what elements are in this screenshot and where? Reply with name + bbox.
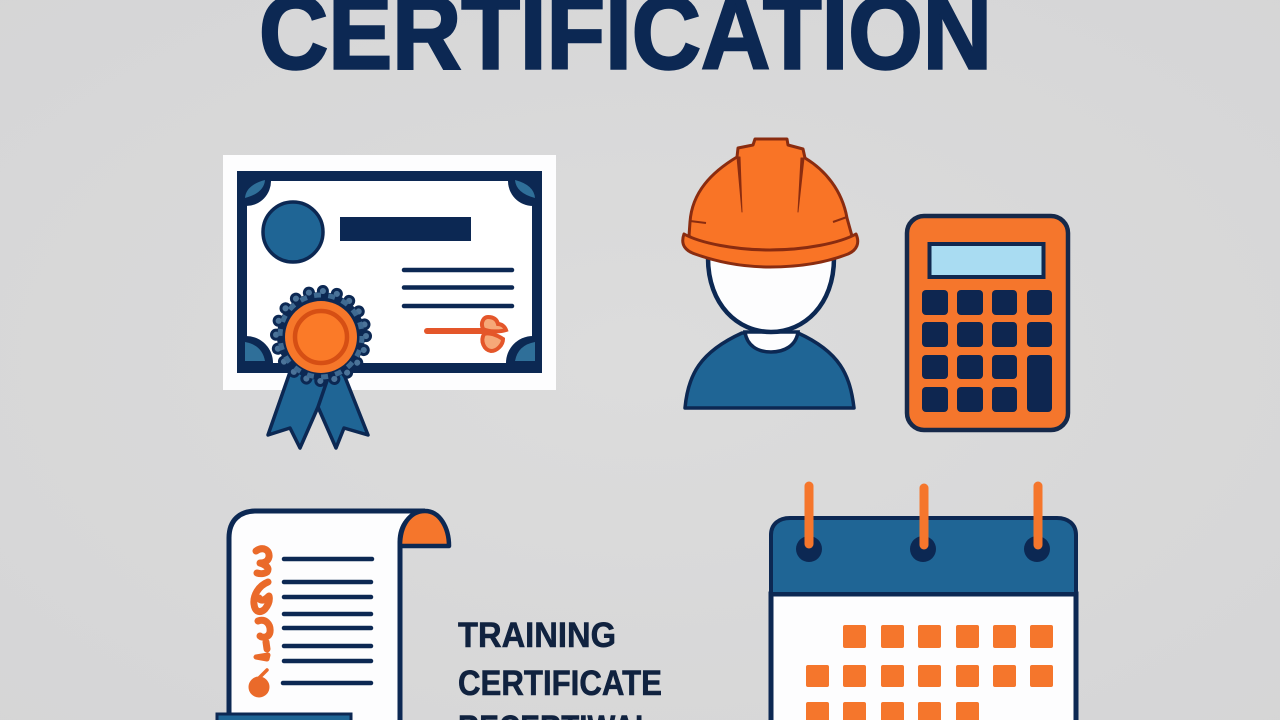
calculator keys xyxy=(922,290,1052,412)
binding rings xyxy=(809,486,1038,545)
text block: training certificate: CERTIFICATE xyxy=(458,664,662,703)
calendar header xyxy=(771,518,1076,594)
icon: calendar xyxy=(771,486,1076,720)
text block: training certificate: TRAINING xyxy=(458,616,616,655)
calculator body xyxy=(907,216,1068,430)
certificate paper xyxy=(223,155,556,390)
text block: training certificate xyxy=(458,616,662,720)
binding holes xyxy=(796,536,1050,562)
signature xyxy=(427,317,506,351)
scroll base xyxy=(217,714,351,720)
frame corner ornaments xyxy=(245,180,535,364)
emblem circle xyxy=(263,202,323,262)
icon: calculator xyxy=(907,216,1068,430)
ribbon tails xyxy=(268,372,368,448)
name bar xyxy=(340,217,471,241)
worker head xyxy=(708,258,834,332)
calendar page xyxy=(771,594,1076,720)
orange marks xyxy=(250,549,270,696)
scroll text lines xyxy=(283,559,372,683)
scroll curl xyxy=(400,511,449,546)
certificate frame xyxy=(242,176,537,368)
calendar day squares xyxy=(806,625,1053,720)
icon: worker with hard hat xyxy=(683,139,858,408)
icon: certificate with rosette xyxy=(223,155,556,448)
hard hat xyxy=(683,139,858,267)
rosette xyxy=(276,291,366,381)
text lines xyxy=(404,270,512,306)
worker neck xyxy=(745,332,798,352)
icon: scroll document xyxy=(217,511,449,720)
calculator screen xyxy=(930,244,1044,277)
worker body xyxy=(685,333,854,408)
scroll sheet xyxy=(229,511,425,720)
